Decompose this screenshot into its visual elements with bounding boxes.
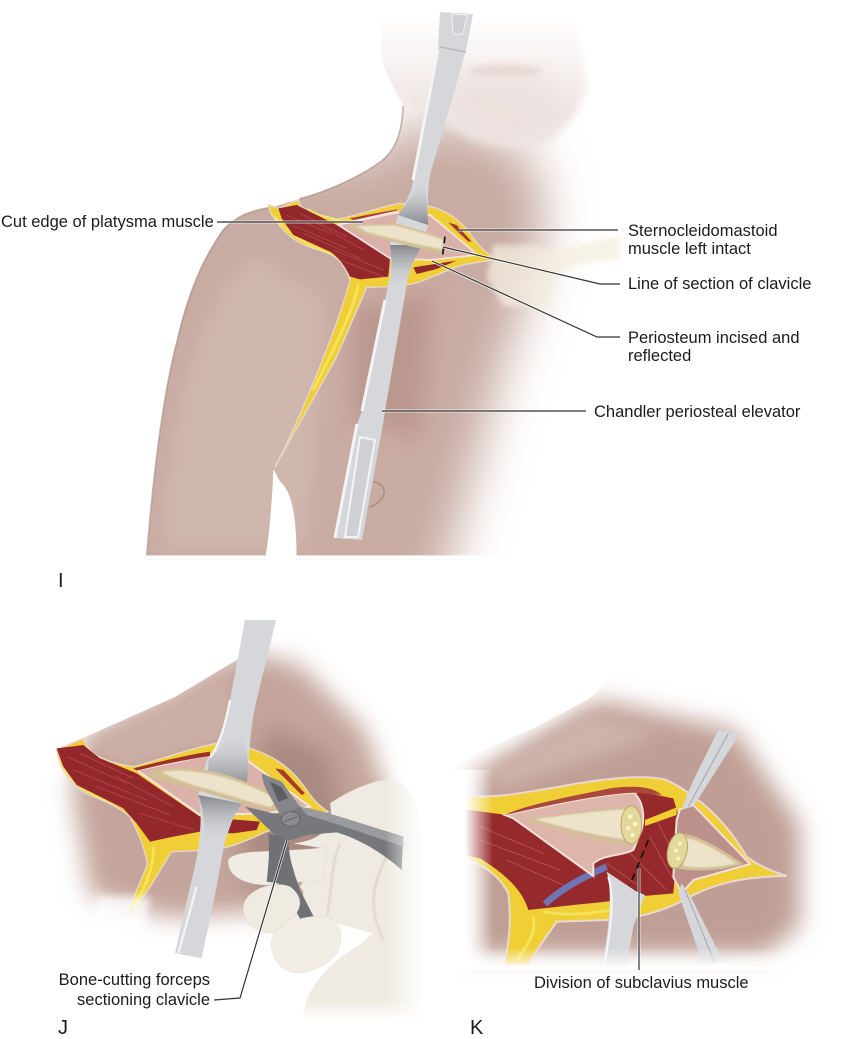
strip fade <box>97 897 150 933</box>
Chandler periosteal elevator <box>335 12 473 540</box>
wound: clavicle exposure <box>268 200 497 467</box>
label: periosteum <box>628 329 800 365</box>
label: division: Division of subclavius muscle <box>534 974 749 992</box>
wound interior <box>338 213 477 260</box>
distal clavicle <box>677 833 743 870</box>
label: forceps: sectioning clavicle <box>77 991 210 1009</box>
divided muscle <box>278 205 390 279</box>
sternocleidomastoid <box>448 223 472 242</box>
label: periosteum: reflected <box>628 347 691 365</box>
arm edge shadow <box>147 106 403 555</box>
label: periosteum: Periosteum incised and <box>628 329 800 347</box>
skin: shoulder, neck and chest <box>146 42 587 560</box>
fat layer <box>57 738 328 917</box>
fades K <box>440 770 825 970</box>
label: cut edge: Cut edge of platysma muscle <box>1 213 214 231</box>
wound J <box>57 738 328 933</box>
label: line of section: Line of section of clavicle <box>628 275 811 293</box>
label: sternocleidomastoid: muscle left intact <box>628 240 751 258</box>
deep muscle <box>457 792 680 910</box>
lower forceps <box>678 883 723 965</box>
clavicle bone <box>347 223 445 255</box>
elevator J <box>175 620 276 958</box>
fat layer <box>268 200 497 467</box>
label: forceps <box>59 971 210 1009</box>
panel: K subclavius division <box>440 700 825 970</box>
retractor <box>602 872 645 965</box>
skin <box>472 700 800 955</box>
wound K <box>457 730 787 965</box>
lower muscle <box>413 261 457 274</box>
fat layer <box>460 777 787 965</box>
panel: I shoulder exposure <box>146 12 621 560</box>
upper forceps <box>683 730 740 809</box>
leader lines <box>214 222 639 1000</box>
label: panel K: K <box>470 1017 484 1039</box>
label: panel I: I <box>58 570 64 592</box>
label: panel J: J <box>58 1017 68 1039</box>
cut muscle edge <box>133 752 210 771</box>
panel: J bone-cutting <box>56 620 414 1016</box>
proximal clavicle <box>523 806 639 845</box>
vein <box>545 867 607 904</box>
skin <box>72 650 395 918</box>
line of section <box>443 237 445 255</box>
forceps <box>245 773 403 922</box>
label: elevator: Chandler periosteal elevator <box>594 403 801 421</box>
sternocleidomastoid <box>275 768 305 795</box>
reflected periosteum flap <box>505 793 643 876</box>
clavicle far side and sternum <box>487 238 620 306</box>
divided muscle <box>57 745 260 842</box>
yellow strand <box>645 807 677 826</box>
clavicle J <box>150 768 283 812</box>
upper cut muscle edge <box>340 210 398 225</box>
label: sternocleidomastoid: Sternocleidomastoid <box>628 222 778 240</box>
division line <box>630 840 648 885</box>
fades J <box>300 760 455 1039</box>
wound interior <box>137 755 310 815</box>
hand in glove <box>228 773 433 1020</box>
label: forceps: Bone-cutting forceps <box>59 971 210 989</box>
label: sternocleidomastoid <box>628 222 778 258</box>
right wound space <box>673 805 750 893</box>
